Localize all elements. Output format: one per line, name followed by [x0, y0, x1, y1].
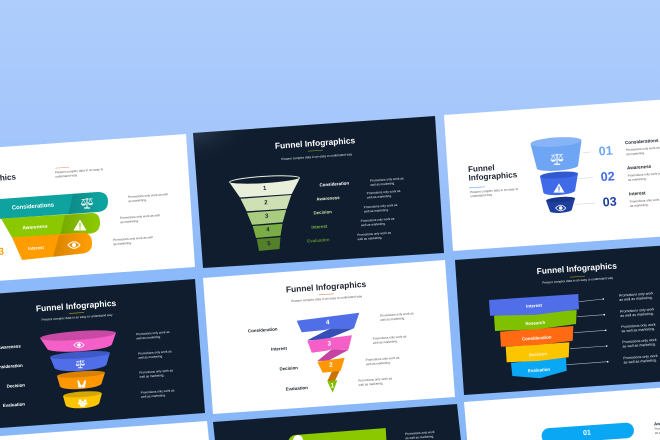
labels: [307, 180, 350, 244]
glow on dark slide: [193, 129, 254, 165]
labels: Evaluation: [285, 385, 308, 392]
description: Promotions only work: [405, 430, 435, 436]
descriptions: Promotions only work as: [373, 334, 407, 341]
numbers: 02: [600, 169, 615, 184]
zigzag funnel: 2: [329, 362, 333, 369]
descriptions: Promotions only work: [623, 354, 658, 360]
descriptions: well as marketing.: [373, 339, 398, 345]
heading: Funnel Infographics: [536, 260, 617, 276]
slide background: [0, 134, 195, 284]
descriptions: [136, 330, 175, 399]
subtitle: Present complex data in an easy to understand way: [281, 152, 353, 161]
funnel: 1: [263, 186, 267, 192]
stacked funnel: Evaluation: [528, 367, 551, 373]
right column labels: Considerations: [625, 138, 659, 145]
descriptions: Promotions only work: [622, 338, 657, 344]
accent lines under headings: [55, 150, 585, 314]
descriptions: Promotions only work as: [141, 388, 175, 395]
pill: [541, 422, 634, 440]
stacked funnel: Research: [525, 320, 546, 326]
descriptions: Promotions only work as: [139, 368, 174, 375]
description 2: as marketing.: [120, 219, 139, 224]
labels: Decision: [6, 382, 25, 389]
zigzag funnel: 3: [327, 340, 332, 348]
heading: Funnel Infographics: [286, 279, 367, 294]
description 3: Promotions only work as well: [113, 235, 153, 242]
right column labels: as marketing.: [628, 177, 647, 182]
descriptions: Promotions only work as: [367, 189, 401, 195]
funnel: [229, 174, 300, 251]
descriptions: well as marketing.: [136, 335, 161, 340]
funnel: [530, 136, 582, 213]
funnel: 2: [264, 200, 269, 206]
description 3: as marketing.: [113, 241, 132, 246]
zigzag funnel: 1: [330, 382, 335, 390]
descriptions: Promotions only work as: [358, 376, 393, 383]
labels: Awareness: [316, 195, 340, 202]
description 1: Promotions only work as well: [128, 192, 168, 199]
description 2: Promotions only work as well: [120, 213, 160, 220]
labels: Evaluation: [3, 401, 25, 408]
descriptions: [358, 311, 415, 387]
labels: Evaluation: [307, 237, 330, 244]
descriptions: well as marketing.: [361, 222, 386, 227]
labels: Decision: [279, 365, 298, 371]
descriptions: Promotions only work as: [364, 203, 398, 209]
descriptions: Promotions only work: [621, 323, 656, 329]
heading: Infographics: [468, 170, 518, 182]
funnel level: interest: [12, 232, 92, 260]
descriptions: well as marketing.: [358, 381, 384, 387]
descriptions: as well as marketing.: [621, 327, 655, 333]
zigzag funnel: [297, 313, 359, 393]
labels: Decision: [313, 209, 332, 215]
numbers: 01: [598, 144, 613, 158]
slide background: [0, 279, 205, 431]
right column labels: Awareness: [627, 164, 652, 170]
descriptions: well as marketing.: [357, 236, 383, 241]
panel: white slide top right: [444, 99, 660, 251]
right column labels: as marketing.: [626, 151, 645, 156]
slide background: [193, 116, 444, 268]
heading: Funnel: [468, 163, 495, 173]
slide background: [455, 245, 660, 395]
labels: Consideration: [248, 326, 278, 334]
funnel: 4: [266, 227, 271, 233]
descriptions: as well as marketing.: [619, 296, 653, 302]
funnel: 5: [267, 241, 272, 247]
descriptions: Promotions only work as: [357, 231, 392, 237]
subtitle: Present complex data in an easy to understand way: [542, 276, 614, 285]
descriptions: well as marketing.: [141, 393, 166, 399]
slide background: [444, 99, 660, 251]
heading: Funnel Infographics: [36, 298, 117, 313]
funnel: 3: [265, 214, 269, 220]
numbers: [598, 144, 617, 209]
funnel level: interest: Interest: [28, 245, 45, 251]
slide background: [213, 404, 462, 440]
stacked funnel: [489, 294, 579, 378]
right column labels: as marketing.: [630, 203, 649, 208]
descriptions: as well as marketing.: [623, 358, 657, 365]
description 1: as marketing.: [128, 198, 147, 203]
subtitle: Present complex data in an easy to: [55, 167, 104, 174]
panel: dark slide middle left: [0, 279, 205, 431]
stacked funnel: Consideration: [522, 334, 552, 342]
descriptions: well as marketing.: [366, 361, 391, 366]
panel: white slide middle centre: [203, 260, 455, 414]
panel: dark slide top centre: [193, 116, 444, 268]
descriptions: well as marketing.: [364, 208, 389, 214]
numbers: 03: [602, 195, 617, 209]
panel: dark slide bottom centre: [213, 404, 462, 440]
descriptions: Promotions only work as: [366, 356, 400, 362]
descriptions: [619, 291, 658, 365]
descriptions: Promotions only work as: [370, 176, 404, 183]
subtitle: Present complex data in an easy to: [470, 187, 519, 194]
descriptions: Promotions only work as: [138, 349, 172, 356]
zigzag funnel: 4: [326, 319, 330, 326]
labels: Interest: [271, 346, 288, 352]
stacked funnel: Interest: [526, 303, 543, 309]
descriptions: well as marketing.: [138, 354, 163, 360]
subtitle: understand way: [470, 193, 493, 198]
descriptions: Promotions only work as: [361, 217, 395, 223]
green bar: [287, 428, 387, 440]
descriptions: well as marketing.: [380, 316, 405, 322]
right column labels: Interest: [629, 190, 646, 196]
descriptions: well as marketing.: [370, 181, 395, 187]
slide background: [464, 387, 660, 440]
descriptions: Promotions only work: [620, 307, 655, 314]
connector lines: [567, 298, 608, 365]
panel: white slide bottom left: [0, 421, 210, 440]
subtitle: understand way: [55, 173, 78, 179]
labels: [0, 343, 25, 408]
subtitle: Present complex data in an easy to understand way: [291, 294, 363, 303]
subtitle: Present complex data in an easy to understand way: [41, 313, 113, 322]
descriptions: [357, 176, 405, 241]
right column labels: [625, 138, 660, 208]
slide background: [203, 260, 455, 414]
descriptions: Promotions only work as: [136, 330, 170, 336]
funnel level: awareness: [1, 213, 100, 238]
descriptions: well as marketing.: [367, 194, 392, 200]
descriptions: well as marketing.: [139, 373, 165, 379]
funnel level: considerations: Considerations: [12, 203, 54, 211]
pill: 01: [583, 430, 591, 437]
panel: dark slide middle right: [455, 245, 660, 395]
stacked funnel: Decision: [529, 351, 548, 357]
heading: Funnel Infographics: [275, 135, 356, 151]
descriptions: as well as marketing.: [620, 312, 654, 318]
funnel: [40, 328, 116, 408]
labels: [248, 326, 308, 392]
descriptions: Promotions only work as: [380, 311, 414, 318]
labels: Interest: [311, 224, 328, 230]
funnel level: awareness: Awareness: [22, 224, 48, 231]
funnel level: considerations: [0, 192, 108, 219]
panel: white slide bottom right: [464, 387, 660, 440]
descriptions: as well as marketing.: [622, 342, 656, 349]
panel: white slide top left: [0, 134, 195, 284]
descriptions: Promotions only work: [619, 291, 654, 298]
labels: Consideration: [319, 180, 350, 188]
